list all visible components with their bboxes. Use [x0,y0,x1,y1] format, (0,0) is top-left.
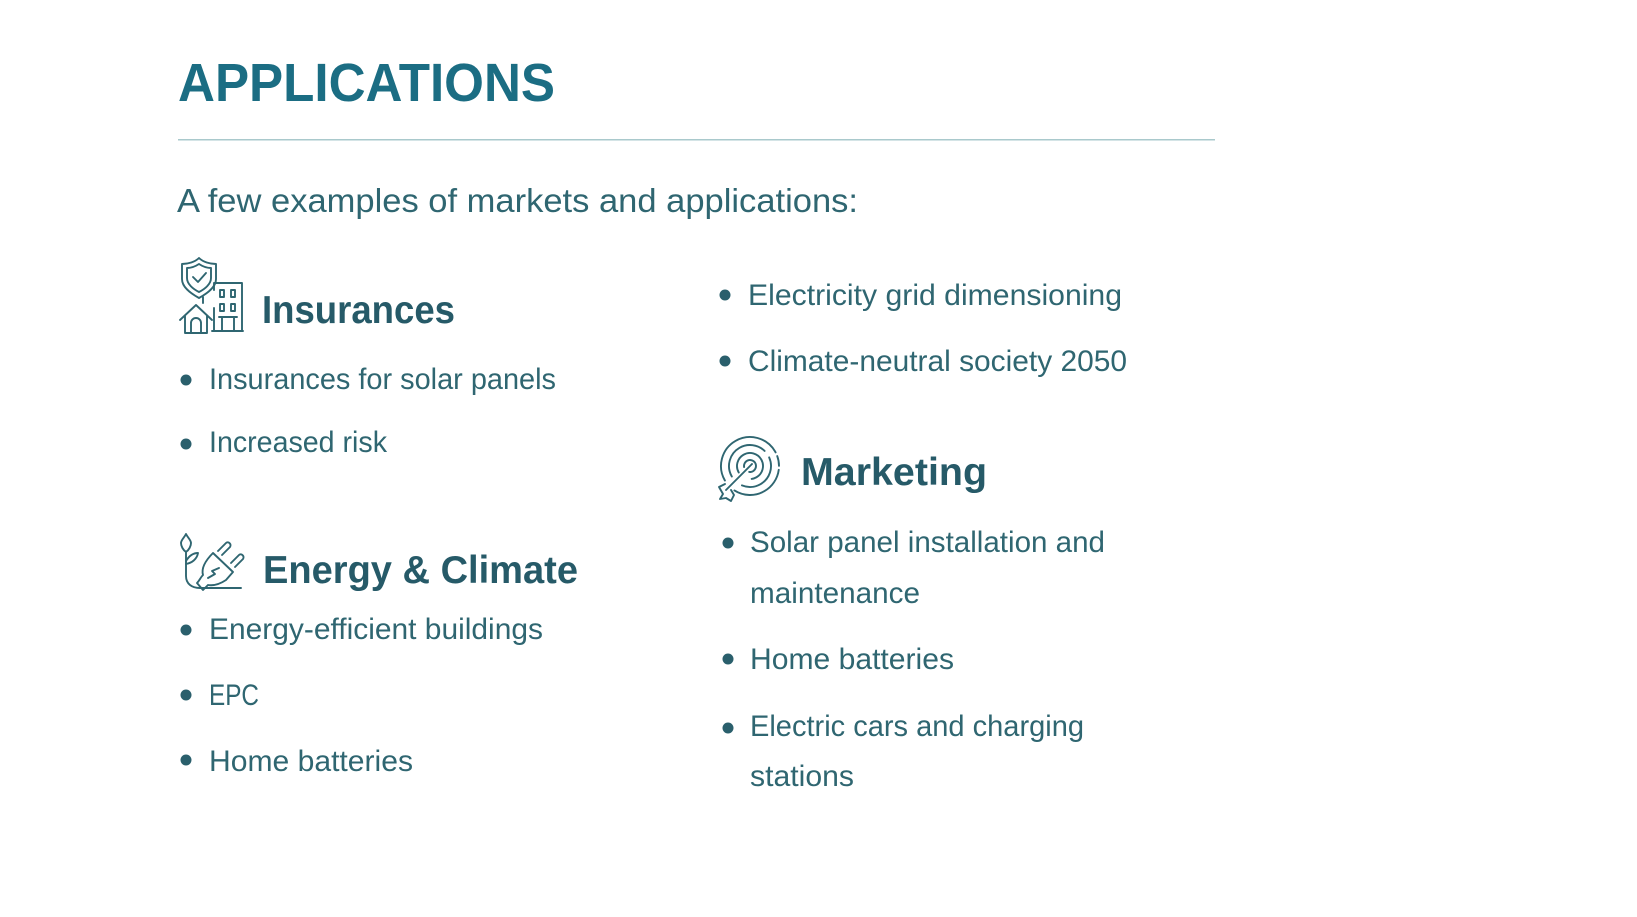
bullet list: insurances [180,363,556,459]
panel: energy and climate [180,534,578,778]
heading: Insurances: Insurances [262,289,455,332]
icon: plug and sprout [181,534,244,590]
bullet list: energy and climate: EPC [209,679,259,712]
bullet list: marketing: maintenance [750,577,920,610]
icon: target with arrow [710,426,790,506]
bullet list: energy and climate: Home batteries [209,745,413,778]
title: APPLICATIONS [178,53,555,113]
bullet list: energy and climate [180,613,543,778]
bullet list: grid and society: Climate-neutral society 2050 [748,345,1127,378]
bullet list: marketing [722,526,1105,793]
panel: insurances [180,258,556,459]
panel: marketing [710,426,1105,793]
bullet list: insurances: Increased risk [209,426,388,459]
heading: Marketing: Marketing [801,451,987,494]
heading: Energy & Climate: Energy & Climate [263,549,578,592]
bullet list: insurances: Insurances for solar panels [209,363,556,396]
bullet list: energy and climate: Energy-efficient buildings [209,613,543,646]
bullet list: grid and society [720,279,1127,378]
icon: shield, building and house [180,258,243,333]
bullet list: marketing: stations [750,760,854,793]
bullet list: grid and society: Electricity grid dimensioning [748,279,1122,312]
bullet list: marketing: Electric cars and charging [750,710,1084,743]
bullet list: marketing: Solar panel installation and [750,526,1105,559]
bullet list: marketing: Home batteries [750,643,954,676]
intro text: A few examples of markets and applications: [177,182,858,219]
